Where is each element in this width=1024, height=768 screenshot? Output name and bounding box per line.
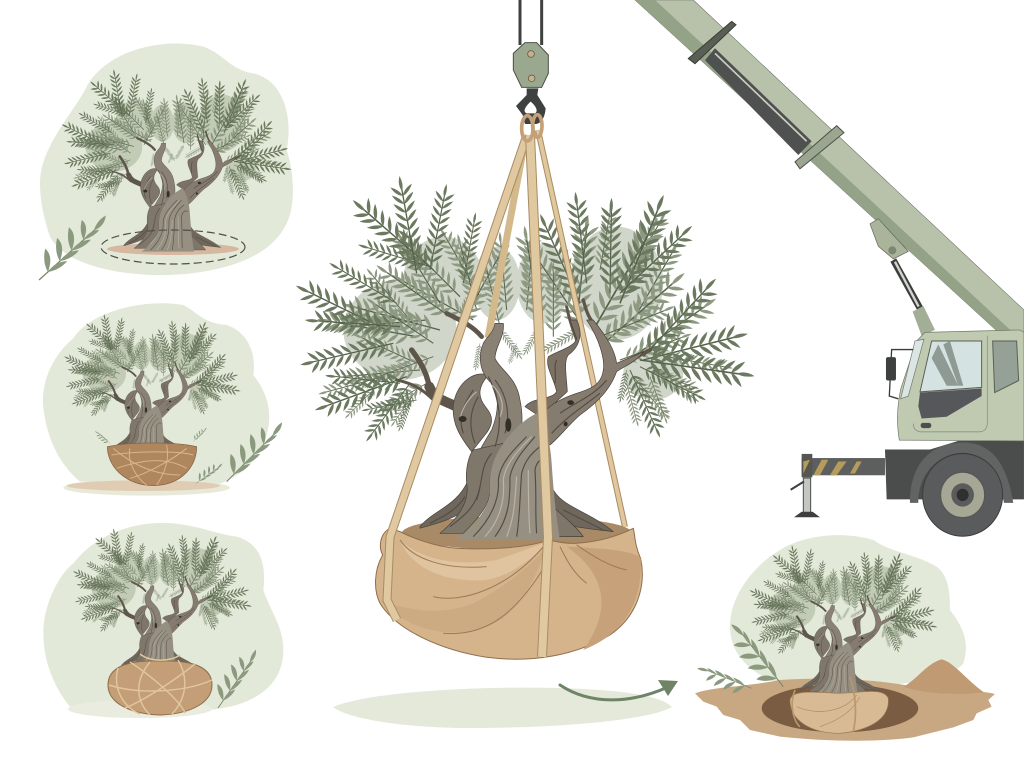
small olive tree bbox=[62, 313, 242, 454]
boom collar lower bbox=[795, 126, 844, 169]
small olive tree bbox=[59, 68, 293, 252]
soil ground bbox=[695, 679, 995, 741]
small olive tree bbox=[71, 528, 253, 670]
olive sprig bbox=[215, 412, 287, 485]
burlap root ball bbox=[790, 677, 888, 733]
small sprig on ground bbox=[192, 459, 224, 485]
dashed digging circle bbox=[101, 230, 245, 264]
background blob 3 bbox=[43, 523, 283, 714]
planting hole bbox=[762, 684, 918, 732]
sprigs beside trunk bbox=[93, 425, 208, 446]
panel: step 1 marked root zone bbox=[26, 43, 293, 284]
crane bbox=[635, 0, 1024, 536]
dirt mound bbox=[903, 659, 984, 694]
olive sprig bbox=[26, 204, 111, 284]
planted olive tree bbox=[747, 544, 938, 694]
hydraulic cylinder bbox=[870, 219, 935, 336]
wheel bbox=[923, 454, 1003, 536]
ground shadow bbox=[68, 700, 212, 718]
olive sprig bbox=[206, 643, 261, 710]
panel: step 2 root ball wrapped bbox=[43, 303, 287, 496]
background blob 2 bbox=[43, 303, 269, 485]
crane hook bbox=[516, 88, 546, 124]
front lifting straps bbox=[387, 135, 548, 657]
central tree trunk bbox=[397, 300, 650, 540]
ground shadow bbox=[63, 480, 230, 496]
sling rings bbox=[522, 115, 542, 141]
olive sprig low bbox=[693, 664, 753, 699]
background blob 4 bbox=[730, 535, 966, 690]
olive sprig upright bbox=[720, 620, 787, 697]
soil patch bbox=[107, 243, 239, 255]
burlap ball with ropes bbox=[108, 654, 212, 715]
ground shadow under lifted tree bbox=[333, 688, 672, 728]
back lifting straps bbox=[488, 130, 625, 527]
woven root basket bbox=[107, 443, 197, 486]
central tree soil bbox=[402, 516, 632, 550]
boom arm bbox=[635, 0, 1024, 344]
hook block and cables bbox=[513, 0, 548, 141]
central lifted olive tree foliage bbox=[290, 174, 757, 447]
panel: step 5 planted in pit bbox=[693, 535, 995, 741]
pulley block bbox=[513, 43, 548, 87]
movement arrow bbox=[560, 680, 678, 700]
chassis and outrigger bbox=[791, 441, 1024, 517]
burlap root ball bbox=[376, 528, 642, 659]
lift cables bbox=[520, 0, 542, 45]
panel: step 3 burlap tied bbox=[43, 523, 283, 718]
truck cab bbox=[886, 330, 1024, 441]
background blob 1 bbox=[40, 43, 293, 275]
boom collar upper bbox=[688, 21, 736, 64]
